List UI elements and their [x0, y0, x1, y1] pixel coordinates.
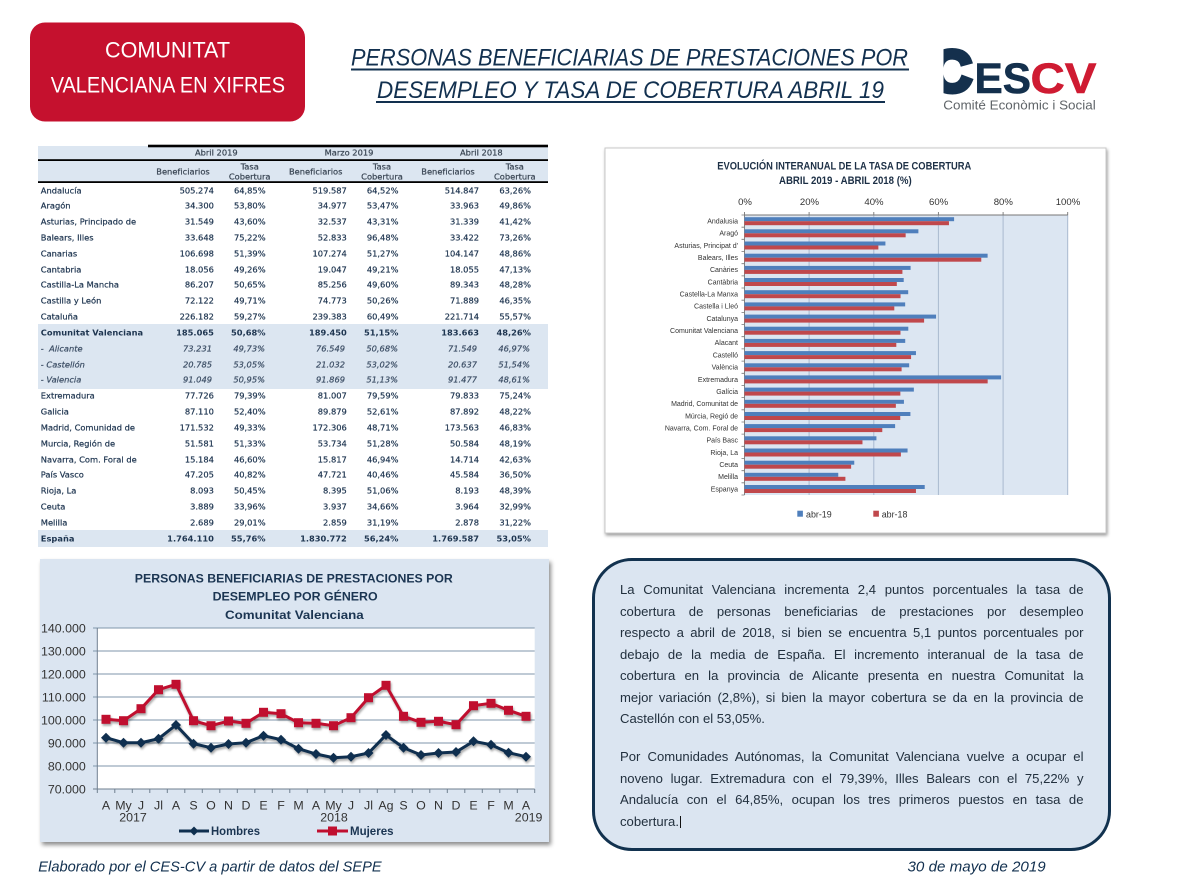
line chart title: Comunitat Valenciana: [225, 608, 364, 622]
table rows: 183.663: [441, 328, 479, 338]
table rows: 1.764.110: [167, 534, 214, 544]
table rows: 49,60%: [367, 279, 399, 289]
line chart x axis labels: O: [416, 798, 426, 812]
bar chart legend: abr-18: [882, 509, 907, 520]
table rows: 173.563: [445, 422, 479, 432]
line chart x axis labels: F: [277, 798, 285, 812]
table rows: - Valencia: [41, 374, 81, 384]
table rows: 71.549: [448, 344, 477, 354]
table rows: Cataluña: [41, 311, 78, 321]
table rows: 89.879: [318, 406, 347, 416]
bar chart category labels: Comunitat Valenciana: [670, 328, 738, 335]
table rows: Rioja, La: [41, 486, 76, 496]
table header: Abril 2018: [460, 147, 503, 157]
panel: commentary box: [592, 558, 1111, 850]
table rows: 2.878: [455, 517, 479, 527]
table rows: 18.055: [450, 264, 479, 274]
table rows: 14.714: [450, 454, 479, 464]
table rows: 41,42%: [499, 217, 531, 227]
table rows: 1.769.587: [432, 534, 479, 544]
bar chart title: [717, 160, 972, 187]
table rows: Castilla-La Mancha: [41, 279, 119, 289]
table rows: 21.032: [316, 359, 345, 369]
table rows: 239.383: [312, 311, 347, 321]
table rows: 32.537: [318, 217, 347, 227]
table rows: 189.450: [309, 328, 347, 338]
table rows: 50,26%: [367, 295, 399, 305]
bar chart axis labels: 60%: [929, 197, 949, 208]
table rows: 96,48%: [367, 232, 399, 242]
line chart legend: [179, 825, 394, 838]
line chart x axis labels: 2018: [320, 810, 348, 824]
bar chart category labels: Cantàbria: [708, 279, 738, 286]
table rows: 79.833: [450, 390, 479, 400]
line chart x axis labels: A: [522, 798, 531, 812]
table header: Beneficiarios: [289, 167, 342, 177]
line chart title: PERSONAS BENEFICIARIAS DE PRESTACIONES POR: [135, 571, 453, 585]
table rows: 107.274: [312, 248, 347, 258]
table rows: 505.274: [180, 185, 214, 195]
table header: Cobertura: [494, 172, 536, 182]
table rows: 73.231: [183, 344, 212, 354]
table rows: Cantabria: [41, 264, 81, 274]
table rows: 51,33%: [234, 438, 266, 448]
text block: commentary: cobertura en la provincia de Alicante presenta en nuestra Comunitat la: [620, 668, 1084, 683]
line chart y axis labels: 100.000: [41, 713, 86, 727]
table rows: 32,99%: [499, 501, 531, 511]
table header: [156, 147, 536, 182]
table rows: 49,21%: [367, 264, 399, 274]
table rows: 31,19%: [367, 517, 399, 527]
table rows: 79,59%: [367, 390, 399, 400]
table rows: 76.549: [316, 344, 345, 354]
table rows: 60,49%: [367, 311, 399, 321]
table rows: 47,13%: [499, 264, 531, 274]
table rows: 53,47%: [367, 201, 399, 211]
table rows: 53,05%: [233, 359, 265, 369]
badge: Comunitat Valenciana en xifres: [30, 22, 305, 122]
table rows: 1.830.772: [300, 534, 347, 544]
text block: commentary: noveno lugar. Extremadura con el 79,39%, Illes Balears con el 75,22% y: [620, 771, 1084, 786]
table rows: 47.721: [318, 470, 347, 480]
text block: commentary: Castellón con el 53,05%.: [620, 711, 765, 726]
table rows: 50,45%: [234, 486, 266, 496]
footer: source: Elaborado por el CES-CV a partir de datos del SEPE: [38, 859, 383, 876]
logo: CES-CV: ES: [974, 55, 1031, 103]
table rows: 48,22%: [499, 406, 531, 416]
line chart x axis labels: N: [224, 798, 233, 812]
table rows: 34.300: [185, 201, 214, 211]
line chart x axis labels: 2019: [515, 810, 542, 824]
table rows: 2.689: [190, 517, 214, 527]
table rows: 50,65%: [234, 279, 266, 289]
panel: bar chart tasa de cobertura: [605, 148, 1106, 533]
table rows: 51,27%: [367, 248, 399, 258]
bar chart category labels: València: [712, 365, 738, 372]
table rows: 40,82%: [234, 470, 266, 480]
bar chart axis labels: 0%: [738, 197, 752, 208]
data table: [38, 145, 548, 547]
bar chart category labels: Castelló: [713, 352, 738, 359]
table rows: 52,61%: [367, 406, 399, 416]
bar chart category labels: Balears, Illes: [698, 255, 738, 262]
line chart x axis labels: M: [293, 798, 304, 812]
table rows: 48,61%: [498, 374, 530, 384]
title: [351, 44, 909, 104]
table header: Tasa: [240, 162, 259, 172]
bar chart category labels: Andalusia: [707, 218, 738, 226]
table rows: Galicia: [41, 406, 69, 416]
line chart x axis labels: E: [259, 798, 268, 812]
line chart x axis labels: M: [503, 798, 514, 812]
table rows: 52,40%: [234, 406, 266, 416]
table rows: 34,66%: [367, 501, 399, 511]
table rows: 75,22%: [234, 232, 266, 242]
table rows: 53.734: [318, 438, 347, 448]
table rows: 51,15%: [364, 328, 399, 338]
table rows: Andalucía: [41, 185, 82, 195]
table rows: 50,68%: [366, 344, 398, 354]
badge: Comunitat Valenciana en xifres: VALENCIANA EN XIFRES: [51, 72, 285, 97]
table rows: 33.963: [450, 201, 479, 211]
table rows: 20.785: [183, 359, 212, 369]
table rows: 8.395: [323, 486, 347, 496]
footer: date: 30 de mayo de 2019: [908, 859, 1046, 876]
table rows: 42,63%: [499, 454, 531, 464]
text block: commentary: Andalucía con el 64,85%, ocupan los tres primeros puestos en tasa de: [620, 792, 1084, 807]
table rows: 91.477: [448, 374, 478, 384]
line chart x axis labels: D: [452, 798, 461, 812]
table rows: 15.184: [185, 454, 214, 464]
badge: Comunitat Valenciana en xifres: COMUNITAT: [105, 38, 230, 63]
bars abr-18: [744, 221, 988, 493]
table rows: 51,06%: [367, 486, 399, 496]
line chart x axis labels: S: [189, 798, 198, 812]
text block: commentary: La Comunitat Valenciana incrementa 2,4 puntos porcentuales la tasa de: [620, 582, 1084, 597]
line chart title: [135, 571, 453, 622]
table rows: 33.648: [185, 232, 214, 242]
line chart x axis labels: A: [172, 798, 181, 812]
bar chart axis labels: 20%: [800, 197, 820, 208]
table rows: 43,31%: [367, 217, 399, 227]
table rows: 49,33%: [234, 422, 266, 432]
line chart y axis labels: 90.000: [48, 736, 86, 750]
line chart x axis labels: E: [469, 798, 478, 812]
table rows: 48,39%: [499, 486, 531, 496]
table rows: 72.122: [185, 295, 214, 305]
table rows: 31.339: [450, 217, 479, 227]
line chart x axis labels: Jl: [154, 798, 163, 812]
table rows: 87.110: [185, 406, 214, 416]
bar chart category labels: Asturias, Principat d': [674, 243, 738, 250]
table rows: 49,86%: [499, 201, 531, 211]
line chart legend: Mujeres: [350, 825, 394, 838]
table rows: 15.817: [318, 454, 347, 464]
bar chart legend: abr-19: [806, 509, 832, 520]
table rows: 79,39%: [234, 390, 266, 400]
table rows: Comunitat Valenciana: [41, 328, 143, 338]
line chart x axis labels: My: [325, 798, 343, 812]
table rows: 33.422: [450, 232, 479, 242]
table rows: 19.047: [318, 264, 347, 274]
table rows: 59,27%: [234, 311, 266, 321]
table header: Abril 2019: [195, 147, 238, 157]
table rows: España: [41, 534, 74, 544]
table rows: Canarias: [41, 248, 77, 258]
line chart x axis labels: D: [242, 798, 251, 812]
line chart x axis labels: F: [487, 798, 495, 812]
line chart x axis labels: J: [138, 798, 144, 812]
title: DESEMPLEO Y TASA DE COBERTURA ABRIL 19: [377, 77, 884, 104]
line chart y axis labels: [41, 621, 86, 796]
table rows: 2.859: [323, 517, 347, 527]
table rows: 56,24%: [364, 534, 399, 544]
table rows: 85.256: [318, 279, 347, 289]
table rows: Ceuta: [41, 501, 65, 511]
line chart x axis labels: O: [206, 798, 216, 812]
table rows: País Vasco: [41, 470, 84, 480]
table rows: 31,22%: [499, 517, 531, 527]
table rows: 86.207: [185, 279, 214, 289]
table rows: Castilla y León: [41, 295, 101, 305]
table rows: 48,26%: [496, 328, 532, 338]
table rows: 3.964: [455, 501, 479, 511]
table rows: 46,94%: [367, 454, 399, 464]
bar chart category labels: [665, 218, 738, 493]
line chart title: DESEMPLEO POR GÉNERO: [213, 588, 378, 603]
text block: commentary: [620, 582, 1084, 829]
table rows: 50,68%: [231, 328, 266, 338]
table rows: 47.205: [185, 470, 214, 480]
text block: commentary: debajo de la media de España. El incremento interanual de la tasa de: [620, 647, 1084, 662]
text block: commentary: respecto a abril de 2018, si bien se encuentra 5,1 puntos porcentuales por: [620, 625, 1084, 640]
table header: Tasa: [505, 162, 524, 172]
table rows: 3.889: [190, 501, 214, 511]
table rows: 8.193: [455, 486, 479, 496]
table rows: 52.833: [318, 232, 347, 242]
bar chart category labels: Navarra, Com. Foral de: [665, 426, 738, 432]
table rows: 34.977: [318, 201, 347, 211]
logo: CES-CV: CV: [1030, 55, 1097, 103]
table rows: 48,71%: [367, 422, 399, 432]
bar chart category labels: Espanya: [711, 486, 738, 493]
table rows: 81.007: [318, 390, 347, 400]
line chart x axis labels: My: [115, 798, 133, 812]
line chart x axis labels: [102, 798, 542, 824]
line chart y axis labels: 80.000: [48, 759, 86, 773]
table rows: Murcia, Región de: [41, 438, 115, 448]
table rows: [41, 185, 532, 544]
table rows: 55,57%: [499, 311, 531, 321]
table rows: 185.065: [176, 328, 214, 338]
line chart x axis labels: A: [102, 798, 111, 812]
table rows: 51,39%: [234, 248, 266, 258]
line: Hombres: [106, 725, 526, 758]
table rows: 91.049: [183, 374, 212, 384]
table rows: 519.587: [312, 185, 347, 195]
table rows: 53,02%: [366, 359, 398, 369]
bar chart category labels: Extremadura: [698, 377, 738, 384]
table rows: 46,97%: [498, 344, 530, 354]
bar chart category labels: Aragó: [719, 231, 738, 238]
table rows: - Alicante: [41, 344, 83, 354]
table rows: 53,80%: [234, 201, 266, 211]
line chart y axis labels: 140.000: [41, 621, 86, 635]
table rows: Extremadura: [41, 390, 95, 400]
line chart y axis labels: 120.000: [41, 667, 86, 681]
table rows: 33,96%: [234, 501, 266, 511]
table rows: 71.889: [450, 295, 479, 305]
table rows: Madrid, Comunidad de: [41, 422, 135, 432]
bar chart category labels: Castella-La Manxa: [680, 292, 738, 298]
table rows: Asturias, Principado de: [41, 217, 136, 227]
table header: Cobertura: [229, 172, 271, 182]
table rows: 20.637: [448, 359, 478, 369]
bar chart title: ABRIL 2019 - ABRIL 2018 (%): [779, 175, 912, 187]
table rows: 46,35%: [499, 295, 531, 305]
table rows: Balears, Illes: [41, 232, 94, 242]
table rows: 50.584: [450, 438, 479, 448]
table rows: 46,83%: [499, 422, 531, 432]
bar chart category labels: Alacant: [715, 340, 738, 347]
bar chart legend: [797, 509, 907, 520]
logo: CES-CV: Comité Econòmic i Social: [943, 97, 1096, 112]
table header: Marzo 2019: [325, 147, 373, 157]
table rows: 50,95%: [233, 374, 265, 384]
table rows: 73,26%: [499, 232, 531, 242]
line chart x axis labels: A: [312, 798, 321, 812]
table rows: 3.937: [323, 501, 347, 511]
table rows: 87.892: [450, 406, 479, 416]
table rows: 63,26%: [499, 185, 531, 195]
table rows: Melilla: [41, 517, 67, 527]
bar chart category labels: Ceuta: [719, 462, 738, 469]
table rows: 226.182: [180, 311, 214, 321]
table rows: 29,01%: [234, 517, 266, 527]
table rows: Aragón: [41, 201, 71, 211]
logo: CES-CV: C: [930, 40, 972, 104]
bar chart category labels: Múrcia, Regió de: [685, 413, 738, 420]
table rows: 48,28%: [499, 279, 531, 289]
panel: line chart by gender: [40, 559, 549, 842]
line chart y axis labels: 130.000: [41, 644, 86, 658]
bar chart category labels: Melilla: [718, 474, 738, 481]
table rows: 51,28%: [367, 438, 399, 448]
table rows: 48,86%: [499, 248, 531, 258]
table header: Beneficiarios: [156, 167, 210, 177]
table rows: 104.147: [445, 248, 479, 258]
bar chart category labels: Rioja, La: [710, 450, 738, 457]
table rows: 74.773: [318, 295, 347, 305]
table rows: 36,50%: [499, 470, 531, 480]
line chart x axis labels: J: [348, 798, 354, 812]
table rows: 221.714: [445, 311, 479, 321]
line chart x axis labels: S: [399, 798, 408, 812]
table rows: 91.869: [316, 374, 345, 384]
bar chart category labels: Castella i Lleó: [694, 304, 738, 311]
table rows: Navarra, Com. Foral de: [41, 454, 137, 464]
bar chart category labels: País Basc: [706, 438, 738, 445]
table rows: 514.847: [445, 185, 479, 195]
table rows: 55,76%: [231, 534, 266, 544]
bar chart axis labels: 40%: [864, 197, 884, 208]
table rows: 51,54%: [498, 359, 530, 369]
line chart x axis labels: Jl: [364, 798, 373, 812]
table rows: - Castellón: [41, 359, 85, 369]
text block: commentary: cobertura.: [620, 814, 679, 829]
table rows: 77.726: [185, 390, 214, 400]
table header: Tasa: [372, 162, 391, 172]
table rows: 53,05%: [496, 534, 532, 544]
table rows: 40,46%: [367, 470, 399, 480]
line chart x axis labels: Ag: [378, 798, 394, 812]
text block: commentary: mejor variación (2,8%), si bien la mayor cobertura se da en la provincia de: [620, 690, 1084, 705]
table rows: 43,60%: [234, 217, 266, 227]
table rows: 18.056: [185, 264, 214, 274]
table header: Cobertura: [361, 172, 403, 182]
bar chart axis labels: [738, 197, 1081, 208]
table rows: 8.093: [190, 486, 214, 496]
text block: commentary: cobertura de personas beneficiarias de prestaciones por desempleo: [620, 604, 1084, 619]
table header: Beneficiarios: [421, 167, 475, 177]
table rows: 64,52%: [367, 185, 399, 195]
table rows: 45.584: [450, 470, 479, 480]
bar chart category labels: Canàries: [710, 267, 738, 274]
bar chart category labels: Madrid, Comunitat de: [671, 401, 738, 408]
title: PERSONAS BENEFICIARIAS DE PRESTACIONES POR: [351, 44, 908, 72]
table rows: 89.343: [450, 279, 479, 289]
table rows: 48,19%: [499, 438, 531, 448]
line chart legend: Hombres: [211, 825, 260, 838]
bar chart category labels: Catalunya: [706, 316, 738, 323]
table rows: 49,26%: [234, 264, 266, 274]
bar chart title: EVOLUCIÓN INTERANUAL DE LA TASA DE COBERTURA: [717, 160, 972, 172]
table rows: 75,24%: [499, 390, 531, 400]
line chart y axis labels: 70.000: [48, 782, 86, 796]
table rows: 106.698: [180, 248, 214, 258]
line chart x axis labels: 2017: [119, 810, 147, 824]
table rows: 64,85%: [234, 185, 266, 195]
logo: CES-CV: [944, 48, 1096, 110]
table rows: 31.549: [185, 217, 214, 227]
table rows: 49,71%: [234, 295, 266, 305]
table rows: 46,60%: [234, 454, 266, 464]
table rows: 172.306: [312, 422, 347, 432]
table rows: 49,73%: [233, 344, 265, 354]
table rows: 51,13%: [366, 374, 398, 384]
text block: commentary: Por Comunidades Autónomas, la Comunitat Valenciana vuelve a ocupar el: [620, 749, 1084, 764]
bar chart axis labels: 80%: [994, 197, 1013, 208]
line chart y axis labels: 110.000: [42, 690, 86, 704]
bar chart category labels: Galícia: [716, 389, 738, 396]
table rows: 51.581: [185, 438, 214, 448]
bar chart axis labels: 100%: [1056, 197, 1081, 208]
bars abr-19: [744, 217, 1001, 489]
line chart x axis labels: N: [434, 798, 443, 812]
line: Mujeres: [106, 684, 526, 726]
table rows: 171.532: [180, 422, 214, 432]
